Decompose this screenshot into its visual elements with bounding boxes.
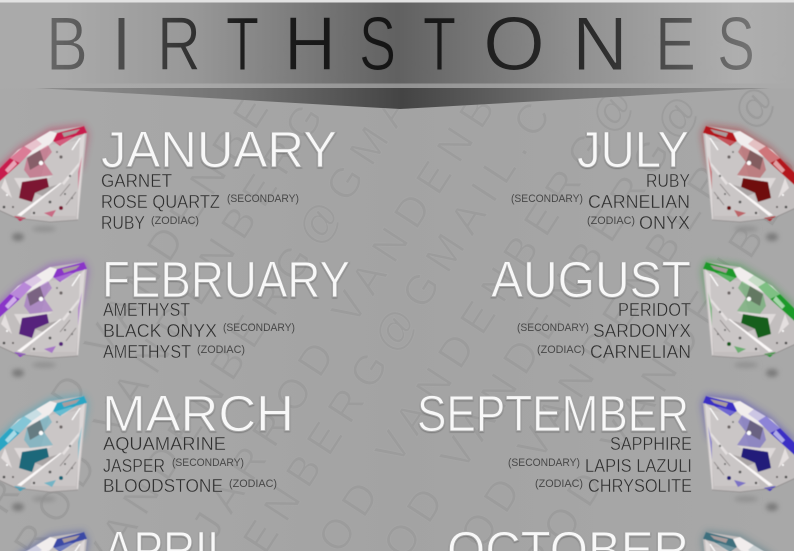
panel: February: (ZODIAC) [197, 344, 245, 356]
title: I [111, 2, 132, 87]
panel: September: SAPPHIRE [610, 434, 692, 454]
panel: September: SEPTEMBER [417, 385, 689, 442]
title: E [655, 2, 696, 87]
panel: July: CARNELIAN [588, 192, 690, 212]
panel: February: AMETHYST [103, 300, 190, 320]
panel: September: (ZODIAC) [535, 478, 583, 490]
panel: September: (SECONDARY) [508, 457, 580, 469]
panel: July: (SECONDARY) [511, 193, 583, 205]
panel: January: JANUARY [101, 121, 337, 178]
gem: January [0, 124, 89, 241]
panel: January: (SECONDARY) [227, 193, 299, 205]
panel: March: AQUAMARINE [103, 434, 226, 454]
panel: February: AMETHYST [103, 342, 191, 362]
panel: January: (ZODIAC) [151, 215, 199, 227]
title [46, 2, 755, 87]
panel: September: LAPIS LAZULI [585, 456, 692, 476]
panel: July [511, 121, 690, 233]
gem: February [0, 260, 89, 377]
panel: July: RUBY [646, 171, 690, 191]
panel: February: (SECONDARY) [223, 322, 295, 334]
panel: February: FEBRUARY [102, 251, 350, 308]
panel: August: (ZODIAC) [537, 344, 585, 356]
panel: September [417, 385, 692, 496]
chevron under banner [35, 88, 770, 109]
panel: January: RUBY [101, 213, 145, 233]
panel: March: (ZODIAC) [229, 478, 277, 490]
panel: August: (SECONDARY) [517, 322, 589, 334]
gem: September [701, 394, 794, 511]
gem: July [701, 124, 794, 241]
panel: February: BLACK ONYX [103, 321, 217, 341]
title: S [359, 2, 396, 87]
title: R [157, 2, 201, 87]
panel: March: BLOODSTONE [103, 476, 223, 496]
panel: August: PERIDOT [618, 300, 691, 320]
panel: August: AUGUST [491, 251, 691, 308]
title: T [226, 2, 259, 87]
panel: March: MARCH [102, 385, 294, 442]
panel: January: GARNET [101, 171, 172, 191]
panel: January: ROSE QUARTZ [101, 192, 220, 212]
gem: October [701, 530, 794, 551]
title: T [423, 2, 456, 87]
title: O [483, 2, 545, 87]
gem: August [701, 260, 794, 377]
gem: April [0, 530, 89, 551]
title: H [284, 2, 336, 87]
title: N [572, 2, 628, 87]
panel: August [491, 251, 691, 362]
panel: July: (ZODIAC) [587, 215, 635, 227]
panel: September: CHRYSOLITE [588, 476, 692, 496]
title: S [717, 2, 755, 87]
panel: July: ONYX [639, 213, 690, 233]
panel: March [102, 385, 294, 496]
panel: August: CARNELIAN [590, 342, 691, 362]
title: B [46, 2, 88, 87]
panel: March: (SECONDARY) [172, 457, 244, 469]
panel: January [101, 121, 337, 233]
panel: March: JASPER [103, 456, 165, 476]
header banner [0, 0, 794, 109]
panel: August: SARDONYX [593, 321, 691, 341]
gem: March [0, 394, 89, 511]
panel: February [102, 251, 350, 362]
panel: July: JULY [577, 121, 689, 178]
